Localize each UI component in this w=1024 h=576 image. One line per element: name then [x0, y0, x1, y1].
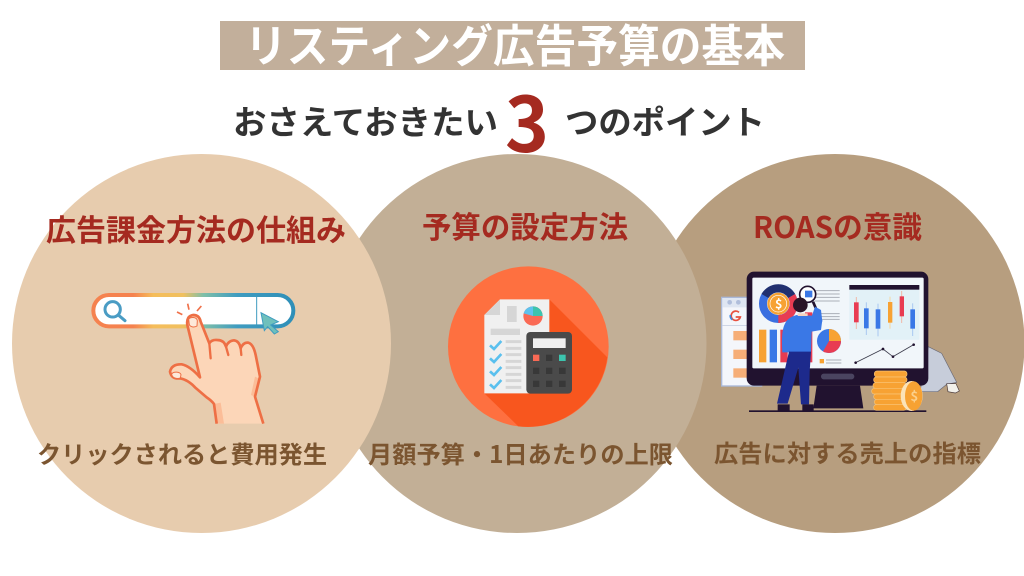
heading: budget: 予算の設定方法: [422, 203, 628, 247]
subtitle: おさえておきたい: [233, 96, 498, 144]
panel: budget: [328, 154, 706, 533]
icon: search bar and pointing hand: [93, 295, 293, 424]
caption: budget: 月額予算・1日あたりの上限: [368, 435, 673, 470]
subtitle: [233, 64, 765, 174]
icon: document and calculator: [448, 266, 609, 427]
icon: analytics monitor: [722, 272, 959, 412]
subtitle: 3: [505, 64, 549, 174]
subtitle: つのポイント: [565, 96, 765, 144]
title: リスティング広告予算の基本: [245, 10, 785, 75]
heading: billing: 広告課金方法の仕組み: [46, 206, 346, 250]
icon: analytics monitor: $: [910, 386, 918, 405]
caption: ROAS: 広告に対する売上の指標: [714, 434, 981, 469]
panel: billing: [12, 154, 391, 533]
heading: ROAS: ROASの意識: [753, 203, 922, 247]
caption: billing: クリックされると費用発生: [37, 435, 327, 470]
panel: ROAS: [646, 154, 1024, 533]
icon: analytics monitor: $: [775, 293, 782, 312]
